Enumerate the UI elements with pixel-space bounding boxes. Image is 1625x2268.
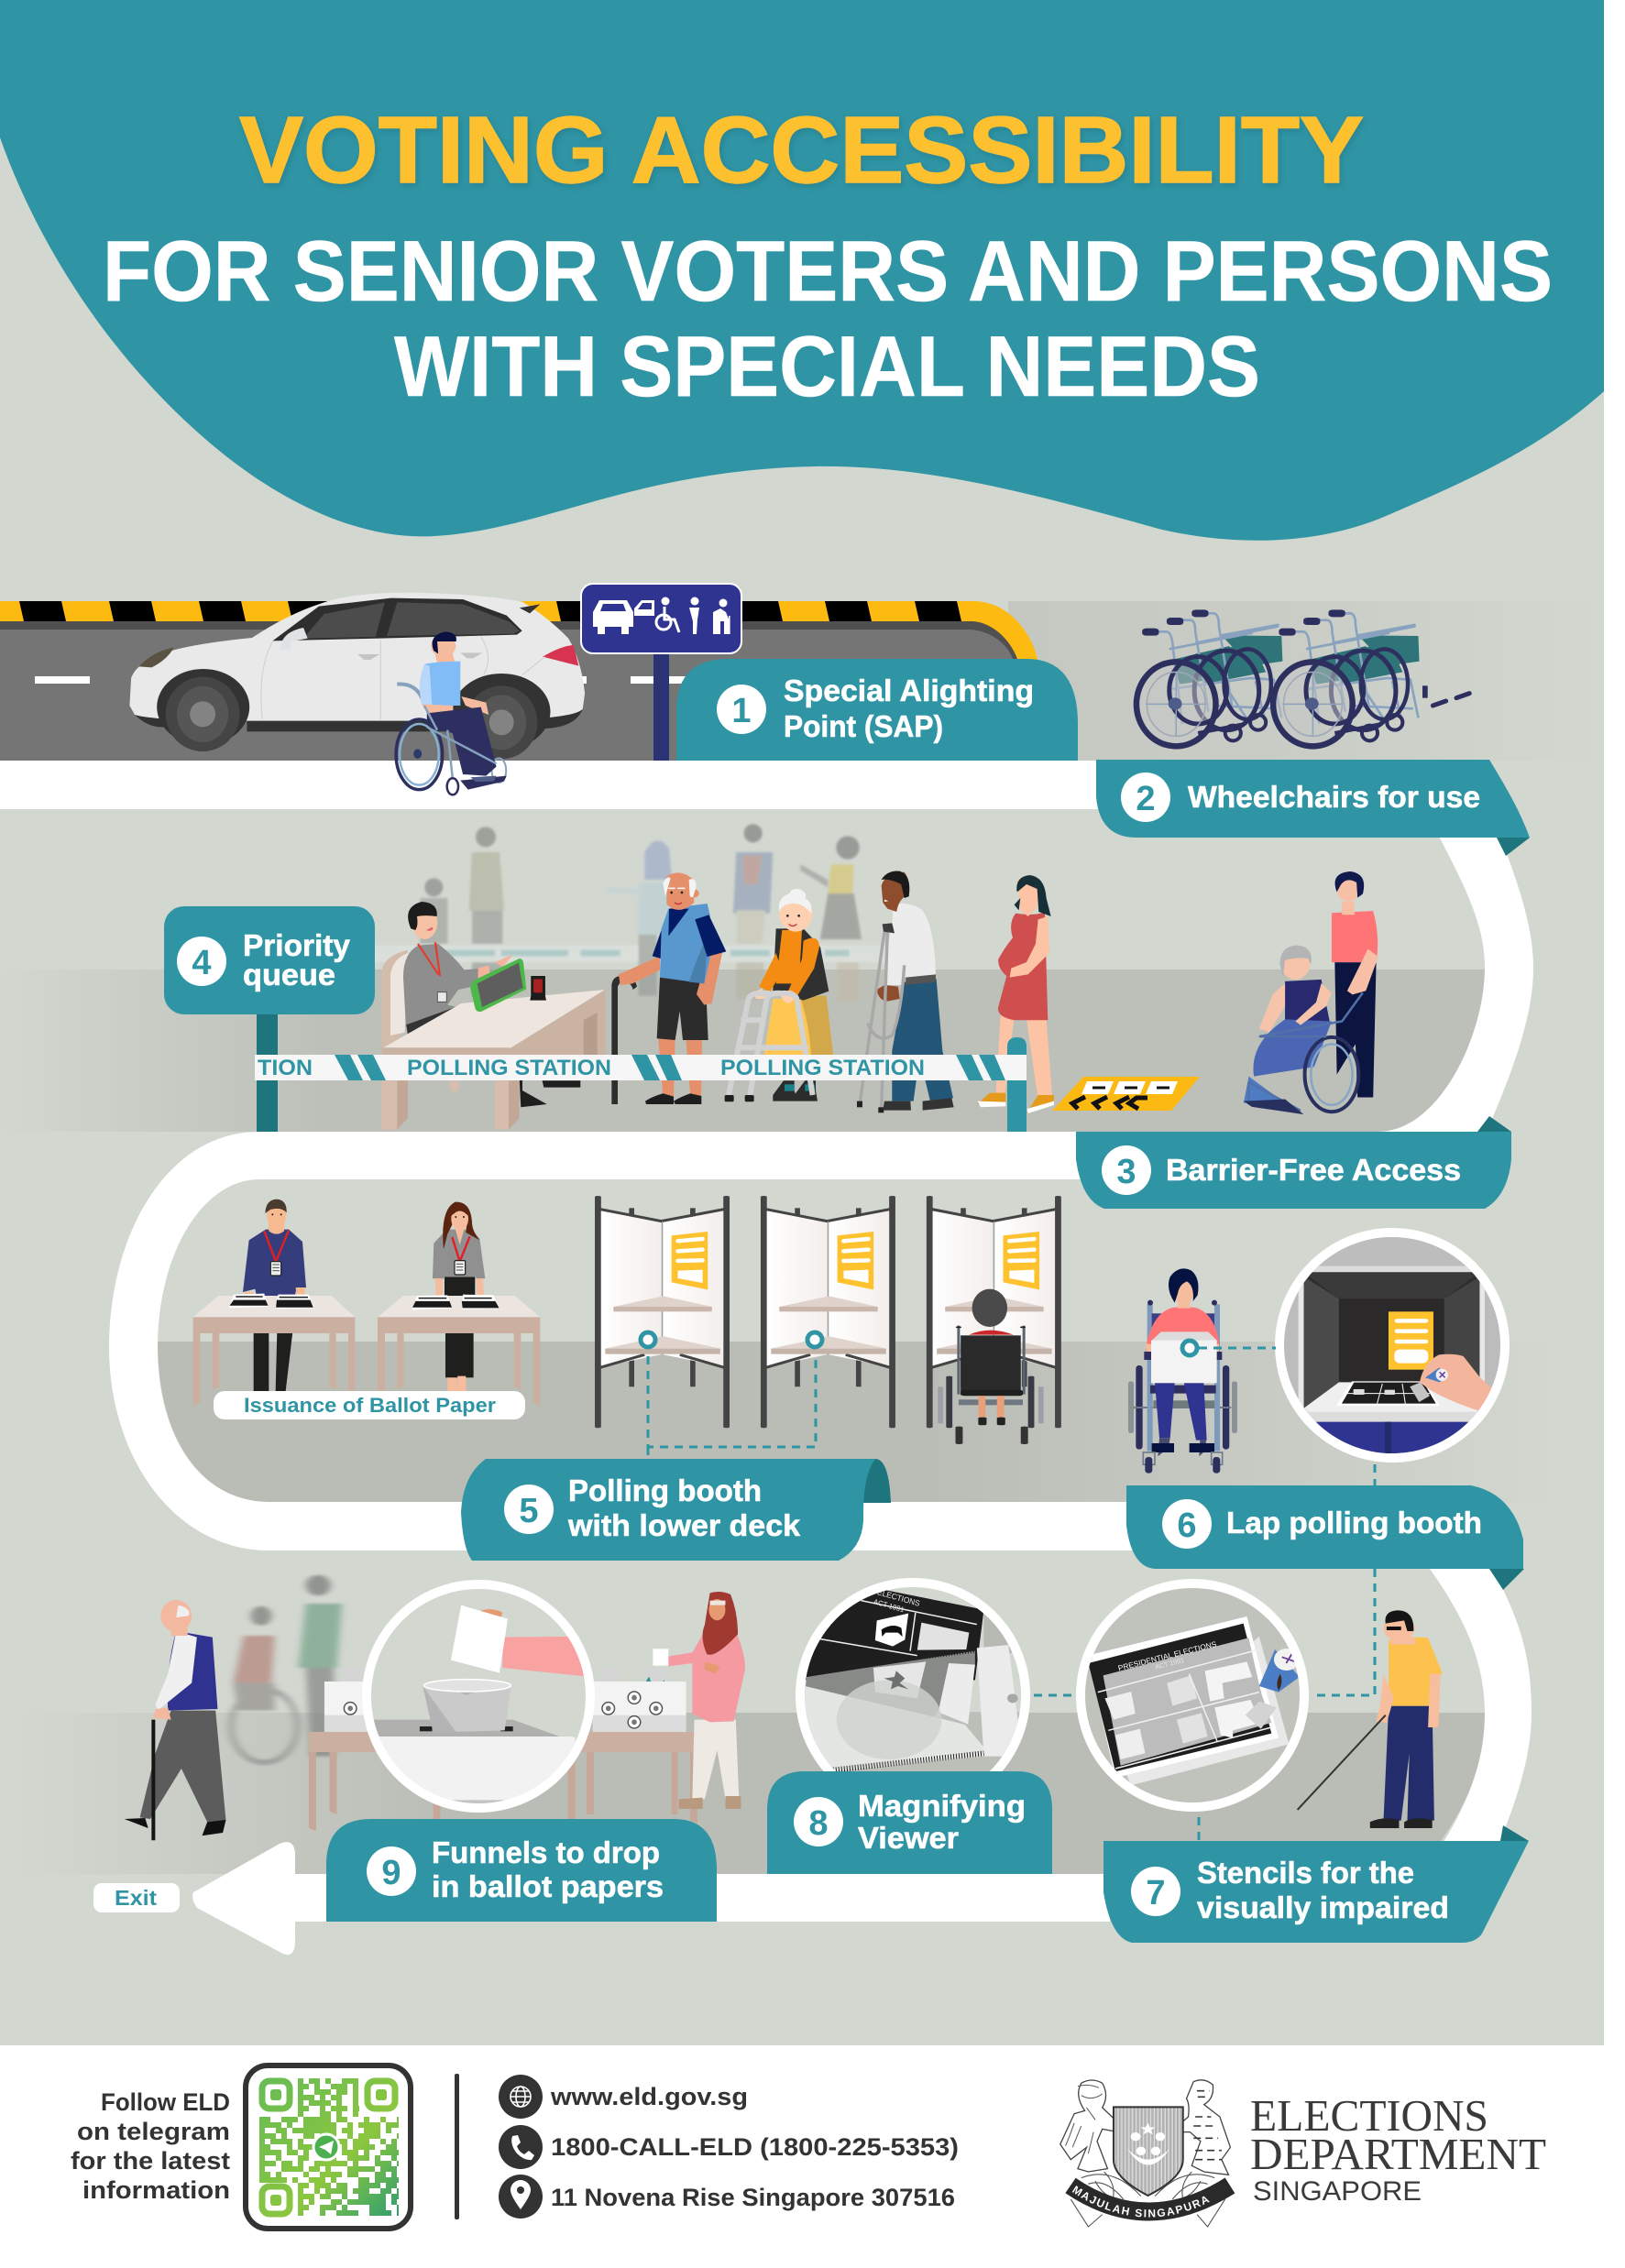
- label: issuance of ballot paper: [214, 1391, 525, 1419]
- ribbon 8: magnifying viewer: 8: [808, 1804, 829, 1843]
- ribbon 5: polling booth with lower deck: Polling booth: [568, 1474, 762, 1507]
- blurred background crowd row 2: [373, 824, 886, 1002]
- floor marking: barrier-free mat: [1052, 1077, 1200, 1111]
- foliage scrolls: [1071, 2172, 1225, 2227]
- icon: senior with cane: [713, 599, 730, 634]
- ribbon 5: polling booth with lower deck: with lower deck: [567, 1508, 801, 1542]
- ribbon 5: polling booth with lower deck: [461, 1459, 891, 1561]
- zoom circle: lap polling booth: [1268, 1222, 1512, 1462]
- barrier tape: POLLING STATION: [720, 1056, 925, 1080]
- ribbon 2: wheelchairs for use: 2: [1136, 780, 1156, 818]
- Elections Department wordmark: SINGAPORE: [1253, 2176, 1422, 2207]
- ribbon 1: special alighting point: [676, 659, 1078, 761]
- post for priority queue sign: [257, 1014, 278, 1132]
- QR code: [246, 2065, 411, 2229]
- icon: map pin: [499, 2175, 543, 2219]
- icon: telegram plane: [313, 2134, 339, 2160]
- crest of Singapore: [1060, 2079, 1235, 2228]
- wheelchair user at drop-off: [396, 631, 507, 794]
- footer divider: [455, 2074, 459, 2219]
- footer band: [0, 2045, 1625, 2268]
- ribbon 2: wheelchairs for use: [1096, 760, 1530, 856]
- barrier tape: TION: [258, 1056, 313, 1080]
- telegram caption: Follow ELD: [101, 2088, 230, 2116]
- subtitle line 2: WITH SPECIAL NEEDS: [394, 318, 1260, 414]
- ribbon 7: stencils: visually impaired: [1197, 1890, 1449, 1924]
- ribbon 9: funnels: [326, 1819, 717, 1922]
- man with white cane and sunglasses: [1298, 1610, 1443, 1828]
- ribbon 3: barrier-free access: [1076, 1116, 1511, 1209]
- title line: voting accessibility: VOTING ACCESSIBILITY: [239, 97, 1364, 203]
- zoom circle: stencil: PRESIDENTIAL ELECTIONS: [1117, 1639, 1218, 1672]
- ribbon 8: magnifying viewer: Viewer: [858, 1821, 959, 1855]
- icon: car with open door: [593, 600, 654, 634]
- ribbon 6: lap polling booth: [1126, 1485, 1524, 1590]
- floor row 2: [0, 970, 1485, 1132]
- label: issuance of ballot paper: Issuance of Ballot Paper: [244, 1394, 496, 1417]
- icon: wheelchair: [656, 607, 679, 632]
- icon: globe: [499, 2075, 543, 2119]
- blurred background people exit row: [231, 1575, 342, 1762]
- zoom circle: stencil: ACT 1991: [1154, 1656, 1185, 1671]
- car: [129, 593, 585, 759]
- seated officer at table: [381, 902, 606, 1130]
- zoom circle: magnifying viewer: ELECTIONS: [876, 1587, 921, 1608]
- voter in wheelchair with lap booth: [1128, 1268, 1237, 1474]
- ribbon 4: priority queue: Priority: [243, 928, 351, 962]
- exit label: Exit: [115, 1886, 157, 1910]
- queue: pregnant woman: [977, 875, 1054, 1113]
- telegram caption: information: [82, 2176, 230, 2204]
- floor row 4: [18, 1713, 1485, 1874]
- wheelchairs illustration: [1136, 609, 1469, 746]
- exit arrow: [192, 1842, 295, 1955]
- Elections Department wordmark: ELECTIONS: [1250, 2090, 1488, 2141]
- ribbon 2: wheelchairs for use: Wheelchairs for use: [1188, 780, 1480, 814]
- ribbon 5: polling booth with lower deck: 5: [519, 1492, 539, 1530]
- ribbon 6: lap polling booth: Lap polling booth: [1226, 1506, 1482, 1539]
- woman pushing senior in wheelchair: [1244, 871, 1378, 1114]
- voter in wheelchair at lower deck booth: [938, 1289, 1044, 1444]
- telegram caption: for the latest: [71, 2147, 230, 2175]
- title: [103, 97, 1553, 414]
- ribbon 9: funnels: Funnels to drop: [432, 1835, 660, 1869]
- queue: senior man with cane: [611, 872, 726, 1104]
- tiger: [1176, 2080, 1230, 2175]
- phone number: 1800-CALL-ELD (1800-225-5353): [551, 2133, 959, 2161]
- telegram caption: on telegram: [77, 2118, 230, 2145]
- queue: man with crutches: [857, 871, 954, 1112]
- barrier tape: [255, 1055, 1027, 1080]
- ribbon 7: stencils: [1103, 1825, 1529, 1943]
- ribbon 4: priority queue: [164, 906, 375, 1014]
- zoom circle: funnel: [367, 1584, 590, 1808]
- ribbon 4: priority queue: 4: [192, 944, 212, 982]
- woman in hijab casting vote: [653, 1592, 745, 1809]
- Elections Department wordmark: [1250, 2090, 1546, 2207]
- ribbon 6: lap polling booth: 6: [1177, 1507, 1197, 1545]
- icon: phone: [499, 2125, 543, 2169]
- queue: senior woman with walker: [725, 889, 833, 1101]
- Elections Department wordmark: DEPARTMENT: [1250, 2129, 1546, 2179]
- icon: pregnant person: [689, 597, 699, 634]
- route path: white winding walkway: [0, 761, 1533, 1922]
- panel: row 1 backdrop behind wheelchairs: [1008, 601, 1604, 761]
- address: 11 Novena Rise Singapore 307516: [551, 2184, 955, 2211]
- exit label: [93, 1883, 180, 1912]
- crest of Singapore: MAJULAH SINGAPURA: [1072, 2186, 1210, 2218]
- website: www.eld.gov.sg: [550, 2083, 748, 2110]
- ribbon 9: funnels: in ballot papers: [432, 1869, 664, 1903]
- ribbon 1: special alighting point: Special Alighting: [784, 674, 1034, 707]
- pins: [641, 1332, 1197, 1692]
- ballot issuers at tables: [193, 1200, 540, 1407]
- ballot box table with boxes: [309, 1668, 697, 1831]
- senior man leaving with cane: [125, 1600, 225, 1840]
- right barrier post: [1007, 1037, 1027, 1132]
- ribbon 8: magnifying viewer: Magnifying: [858, 1789, 1026, 1823]
- ribbon 9: funnels: 9: [381, 1854, 401, 1892]
- zoom circle: stencil: [1081, 1583, 1304, 1807]
- ribbon 1: special alighting point: 1: [731, 692, 752, 730]
- SAP road sign: [581, 584, 741, 761]
- subtitle line 1: FOR SENIOR VOTERS AND PERSONS: [103, 223, 1553, 319]
- header wave panel: [0, 0, 1604, 541]
- road with hazard kerb: [0, 601, 1038, 761]
- ribbon 3: barrier-free access: 3: [1116, 1153, 1136, 1191]
- polling booths: [595, 1196, 1061, 1428]
- ribbon 1: special alighting point: Point (SAP): [784, 709, 943, 743]
- ribbon 8: magnifying viewer: [767, 1771, 1052, 1874]
- ribbon 3: barrier-free access: Barrier-Free Access: [1166, 1153, 1461, 1187]
- floor row 3: [158, 1342, 1558, 1502]
- callouts: dashed connectors: [598, 1348, 1375, 1841]
- barrier tape: POLLING STATION: [407, 1056, 611, 1080]
- lion: [1060, 2080, 1122, 2172]
- telegram caption: [71, 2088, 230, 2204]
- ribbon 4: priority queue: queue: [243, 958, 335, 992]
- zoom circle: magnifying viewer: ACT 1991: [873, 1597, 906, 1614]
- ribbon 7: stencils: Stencils for the: [1197, 1856, 1414, 1890]
- zoom circle: magnifying viewer: [796, 1578, 1030, 1771]
- ribbon 7: stencils: 7: [1146, 1874, 1166, 1912]
